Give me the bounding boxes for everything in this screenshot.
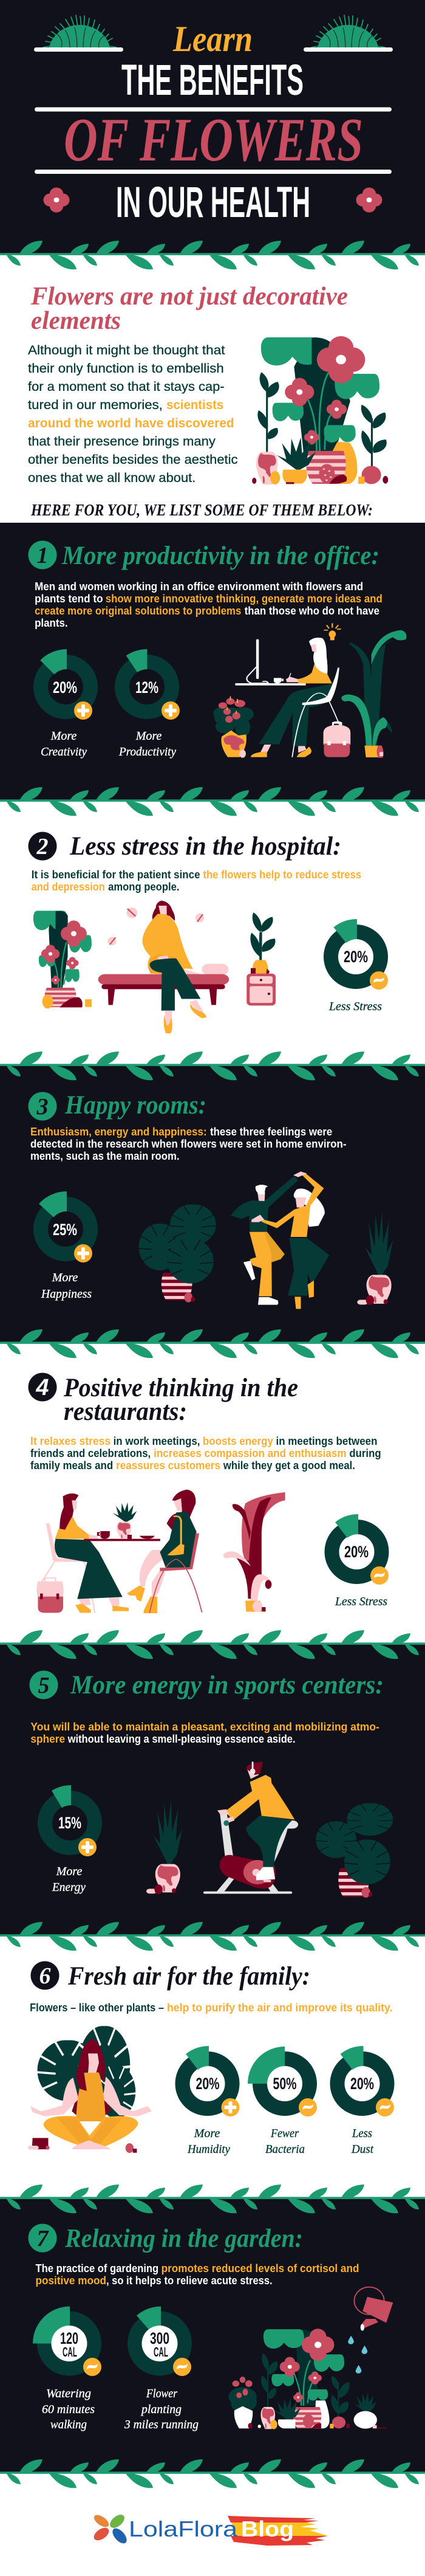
body text 4: during: [349, 1447, 381, 1459]
donut: 300 cal flower planting: CAL: [154, 2344, 168, 2360]
intro heading: Flowers are not just decorative: [30, 283, 348, 311]
intro paragraph: that their presence brings many: [28, 435, 216, 449]
body text 3: ments, such as the main room.: [30, 1150, 180, 1162]
panel: 7 garden: [0, 2198, 425, 2473]
footer logo: LolaFlora Blog: [92, 2512, 328, 2546]
donut: 15% more energy: 15%: [58, 1814, 81, 1832]
donut: 120 cal watering: Watering: [46, 2387, 91, 2400]
donut: 25% more happiness: 25%: [53, 1221, 77, 1239]
panel: introduction: [0, 254, 425, 523]
body text 4: friends and celebrations,: [30, 1447, 151, 1459]
donut: 20% more creativity: More: [50, 729, 76, 743]
title: the benefits: THE BENEFITS: [121, 57, 304, 105]
donut: 300 cal flower planting: 300: [150, 2329, 169, 2347]
body text 5: You will be able to maintain a pleasant, exciting and mobilizing atmo-: [30, 1721, 379, 1733]
number badge 2: [28, 832, 57, 861]
body text 7: positive mood: [35, 2275, 106, 2287]
number badge 5: [29, 1670, 58, 1700]
divider lower: [35, 170, 392, 174]
shelf line left: [34, 47, 123, 52]
donut: 20% more humidity: 20%: [195, 2075, 220, 2093]
donut: 50% fewer bacteria: [248, 2047, 317, 2156]
body text 6: [30, 2002, 392, 2014]
donut: 20% less stress: Less Stress: [328, 1000, 382, 1013]
vine divider 6: [0, 1922, 425, 1951]
donut: 120 cal watering: walking: [50, 2418, 87, 2431]
panel: 2 hospital: [0, 801, 425, 1065]
panel: 5 sports centers: [0, 1644, 425, 1935]
body text 7: The practice of gardening: [35, 2262, 158, 2275]
donut: 12% more productivity: 12%: [135, 678, 158, 697]
intro paragraph: ones that we all know about.: [28, 471, 195, 485]
icon: grass right: [311, 15, 385, 47]
body text 4: It relaxes stress: [30, 1435, 110, 1447]
body text 1: create more original solutions to problems: [35, 605, 241, 617]
panel: 6 family fresh air: [0, 1935, 425, 2198]
intro paragraph: [28, 343, 238, 485]
divider upper: [35, 107, 392, 112]
number badge 7: [28, 2223, 57, 2253]
body text 2: It is beneficial for the patient since: [32, 869, 200, 881]
illustration: patient on bench with plants: [33, 901, 279, 1033]
vine divider 4: [0, 1329, 425, 1358]
donut: 20% less dust: 20%: [350, 2075, 374, 2093]
donut: 50% fewer bacteria: Bacteria: [265, 2143, 305, 2156]
donut: 300 cal flower planting: Flower: [146, 2387, 177, 2400]
body text 1: than those who do not have: [245, 605, 379, 617]
heading 7: Relaxing in the garden:: [64, 2225, 303, 2253]
donut: 12% more productivity: Productivity: [118, 745, 176, 759]
donut: 50% fewer bacteria: Fewer: [270, 2127, 299, 2140]
panel: 3 happy rooms: [0, 1065, 425, 1343]
body text 3: Enthusiasm, energy and happiness:: [30, 1126, 207, 1138]
illustration: two women at restaurant table: [36, 1490, 285, 1613]
donut: 120 cal watering: [33, 2306, 101, 2431]
number badge 6: 6: [39, 1963, 51, 1989]
panel: 4 restaurants: [0, 1343, 425, 1644]
vine divider 3: [0, 1052, 425, 1080]
body text 6: Flowers – like other plants –: [30, 2002, 164, 2014]
donut: 20% less dust: Less: [352, 2127, 372, 2140]
icon: flower right: [356, 187, 382, 213]
illustration: man on exercise bike with plants: [146, 1762, 393, 1898]
body text 3: these three feelings were: [210, 1126, 332, 1138]
donut: 12% more productivity: More: [135, 729, 162, 743]
vine divider 7: [0, 2185, 425, 2213]
number badge 4: [28, 1372, 57, 1402]
donut: 25% more happiness: Happiness: [41, 1287, 92, 1301]
body text 4: [30, 1435, 381, 1472]
vine divider 1: [0, 241, 425, 269]
donut: 300 cal flower planting: planting: [140, 2403, 182, 2416]
donut: 20% less stress: [332, 1514, 389, 1608]
donut: 300 cal flower planting: [124, 2306, 199, 2431]
number badge 3: 3: [36, 1094, 49, 1120]
body text 4: while they get a good meal.: [223, 1459, 355, 1472]
donut: 50% fewer bacteria: 50%: [273, 2075, 296, 2093]
intro heading: [30, 283, 348, 335]
donut: 12% more productivity: [118, 649, 180, 759]
heading 4: [63, 1374, 298, 1426]
body text 1: Men and women working in an office environment with flowers and: [35, 580, 363, 593]
brush stroke: Spanish flag: [228, 2516, 328, 2546]
panel: 1 office: [0, 523, 425, 801]
vine divider 5: [0, 1630, 425, 1659]
donut: 120 cal watering: CAL: [63, 2344, 77, 2360]
donut: 20% less stress: Less Stress: [335, 1595, 387, 1608]
intro paragraph: tured in our memories,: [28, 398, 163, 412]
donut: 300 cal flower planting: 3 miles running: [124, 2418, 199, 2431]
donut: 25% more happiness: [39, 1191, 92, 1301]
vine divider 2: [0, 787, 425, 816]
number badge 4: 4: [35, 1375, 49, 1400]
body text 7: promotes reduced levels of cortisol and: [162, 2262, 359, 2275]
body text 1: plants tend to: [35, 593, 103, 605]
logo wordmark Blog: Blog: [241, 2516, 294, 2541]
body text 3: detected in the research when flowers were set in home environ-: [30, 1138, 346, 1150]
body text 4: family meals and: [30, 1459, 113, 1472]
body text 2: and depression: [32, 881, 105, 893]
intro paragraph: Although it might be thought that: [28, 343, 225, 357]
body text 1: plants.: [35, 617, 68, 629]
body text 4: in work meetings,: [114, 1435, 200, 1447]
number badge 6: [30, 1961, 59, 1990]
donut: 20% less stress: 20%: [344, 948, 368, 966]
body text 4: increases compassion and enthusiasm: [154, 1447, 346, 1459]
donut: 20% more creativity: [40, 649, 92, 759]
donut: 20% more humidity: More: [194, 2127, 220, 2140]
donut: 20% more creativity: 20%: [53, 678, 77, 697]
illustration: woman at office desk with plants: [213, 623, 406, 758]
donut: 120 cal watering: 60 minutes: [42, 2403, 95, 2416]
illustration: watering can and garden: [228, 2287, 393, 2430]
body text 4: in meetings between: [276, 1435, 378, 1447]
body text 1: [35, 580, 382, 629]
donut: 120 cal watering: 120: [60, 2329, 78, 2347]
lead-in line: HERE FOR YOU, WE LIST SOME OF THEM BELOW:: [30, 501, 373, 519]
number badge 2: 2: [36, 834, 49, 859]
donut: 20% less dust: Dust: [351, 2143, 373, 2156]
heading 4: restaurants:: [64, 1397, 187, 1426]
icon: flower left: [44, 187, 69, 213]
number badge 5: 5: [38, 1673, 50, 1698]
icon: four-petal logo mark: [92, 2512, 129, 2546]
donut: 20% less dust: [338, 2046, 394, 2156]
body text 4: boosts energy: [203, 1435, 273, 1447]
shelf line right: [304, 47, 393, 52]
icon: grass left: [43, 15, 117, 47]
body text 6: help to purify the air and improve its quality.: [167, 2002, 392, 2014]
donut: 15% more energy: More: [56, 1865, 82, 1878]
illustration: woman meditating with monstera: [28, 2026, 152, 2153]
body text 5: sphere: [30, 1733, 65, 1745]
intro paragraph: for a moment so that it stays cap-: [28, 380, 225, 394]
heading 6: Fresh air for the family:: [67, 1962, 310, 1991]
illustration: flower garden: [252, 336, 390, 484]
donut: 20% more creativity: Creativity: [41, 745, 87, 759]
donut: 20% less stress: 20%: [344, 1543, 369, 1561]
body text 5: without leaving a smell-pleasing essence aside.: [67, 1733, 296, 1745]
body text 7: , so it helps to relieve acute stress.: [106, 2275, 273, 2287]
body text 1: show more innovative thinking, generate more ideas and: [106, 593, 382, 605]
logo wordmark LolaFlora: LolaFlora: [129, 2516, 238, 2541]
number badge 1: [28, 541, 57, 569]
heading 2: Less stress in the hospital:: [69, 832, 341, 861]
body text 2: the flowers help to reduce stress: [203, 869, 361, 881]
heading 3: Happy rooms:: [64, 1091, 206, 1120]
illustration: dancing couple with plants: [138, 1171, 393, 1309]
donut: 20% more humidity: [182, 2046, 239, 2156]
number badge 1: 1: [36, 543, 49, 568]
body text 2: among people.: [108, 881, 180, 893]
title: Learn: Learn: [172, 19, 253, 59]
body text 5: [30, 1721, 379, 1745]
donut: 20% less stress: [328, 919, 388, 1013]
intro paragraph: other benefits besides the aesthetic: [28, 453, 238, 467]
body text 3: [30, 1126, 346, 1162]
number badge 3: [28, 1092, 57, 1121]
number badge 7: 7: [36, 2226, 50, 2251]
donut: 15% more energy: [45, 1785, 97, 1894]
heading 5: More energy in sports centers:: [70, 1671, 384, 1700]
body text 4: reassures customers: [116, 1459, 220, 1472]
panel: title header: [0, 0, 425, 254]
body text 2: [32, 869, 361, 893]
intro heading: elements: [31, 307, 121, 335]
donut: 20% more humidity: Humidity: [187, 2143, 230, 2156]
intro paragraph: scientists: [166, 398, 223, 412]
donut: 25% more happiness: More: [52, 1271, 78, 1284]
heading 1: More productivity in the office:: [61, 542, 379, 570]
donut: 15% more energy: Energy: [52, 1881, 86, 1894]
intro paragraph: their only function is to embellish: [28, 362, 224, 376]
vine divider 8: [0, 2459, 425, 2488]
intro paragraph: around the world have discovered: [28, 416, 234, 430]
heading 4: Positive thinking in the: [63, 1374, 298, 1402]
body text 7: [35, 2262, 359, 2287]
